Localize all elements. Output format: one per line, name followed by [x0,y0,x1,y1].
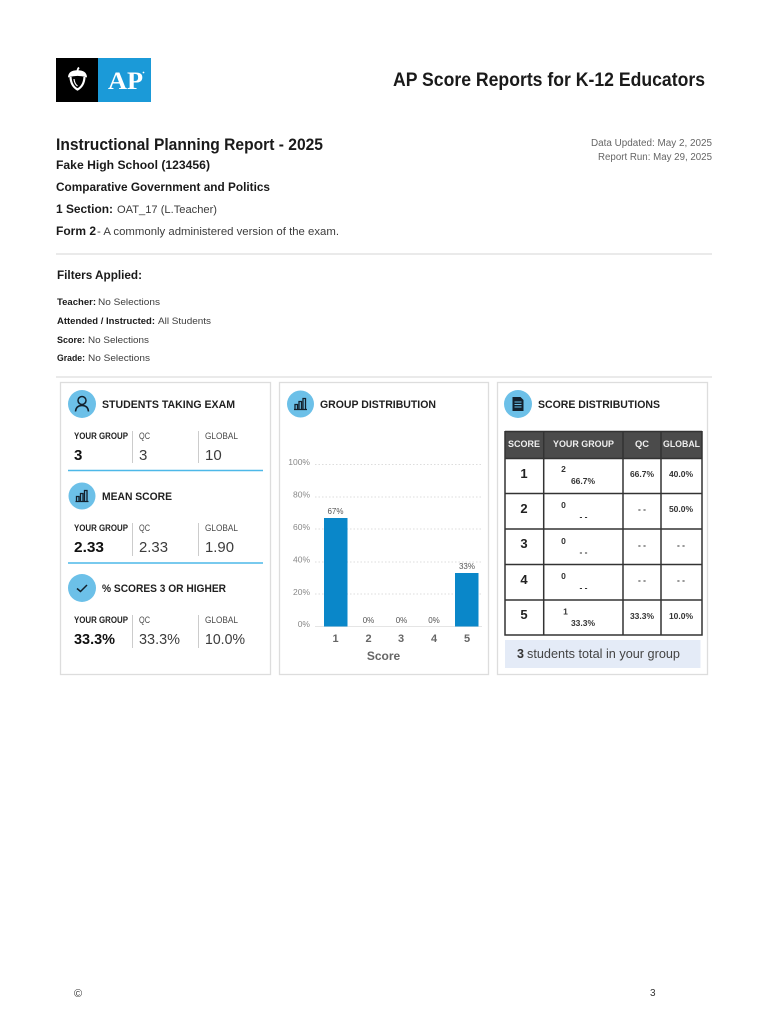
table: 5 [520,607,528,622]
table: 1 [520,466,528,481]
callout: students total: 3 [517,647,524,661]
icon: document [504,390,532,418]
table: 2 [520,501,528,516]
table: 4 [520,572,528,587]
icon: bars [68,482,96,510]
stats: students taking exam: QC [139,431,150,441]
table: - - [677,575,685,585]
bar chart: 40% [293,554,310,564]
report dates: Report Run: May 29, 2025 [598,152,712,163]
report heading: Instructional Planning Report - 2025 [56,136,323,154]
table: - - [638,540,646,550]
table: QC [635,439,649,450]
table: - - [579,512,588,522]
stats: mean score: YOUR GROUP [74,523,128,533]
heading: students taking exam: STUDENTS TAKING EXAM [102,399,235,411]
table: 66.7% [571,476,595,486]
logo: AP [56,58,151,102]
table: 10.0% [669,611,693,621]
stats: mean score: 2.33 [74,539,104,556]
filters list: No Selections [88,353,150,364]
bar chart: 0% [298,619,310,629]
filters list [57,297,211,364]
stats: scores 3 or higher: GLOBAL [205,615,238,625]
table: - - [638,575,646,585]
bar chart: 0% [363,616,374,625]
school name: Fake High School (123456) [56,158,210,172]
report dates [591,138,712,163]
bar chart: 60% [293,522,310,532]
stats: students taking exam: YOUR GROUP [74,431,128,441]
stats: students taking exam: 10 [205,447,222,464]
filters list: Score: [57,335,85,346]
stats: scores 3 or higher: 33.3% [139,631,180,648]
table: GLOBAL [663,439,700,450]
icon: student [68,390,96,418]
panel: summary statistics [60,382,270,674]
footer: copyright: © [74,988,82,1000]
table: - - [579,582,588,592]
stats: mean score: 1.90 [205,539,234,556]
bar chart: 20% [293,587,310,597]
course name: Comparative Government and Politics [56,180,270,194]
bar chart: Score [367,649,400,663]
table: YOUR GROUP [553,439,615,450]
title: AP Score Reports for K-12 Educators [393,69,705,91]
report dates: Data Updated: May 2, 2025 [591,138,712,149]
table: 0 [561,500,566,510]
bar chart: 5 [464,633,470,645]
bar chart: 100% [288,457,310,467]
stats: mean score: QC [139,523,150,533]
filters list: Grade: [57,353,85,364]
form line: Form 2 [56,224,96,238]
footer: page number: 3 [650,988,656,999]
table: SCORE [508,439,540,450]
panel: score distributions [498,382,708,674]
icon: check [68,574,96,602]
icon: acorn [69,68,86,90]
filters list: No Selections [88,335,149,346]
filters list: No Selections [98,297,160,308]
panel: group distribution [280,382,488,674]
table: 0 [561,536,566,546]
icon: bars [287,390,314,418]
stats: students taking exam [74,431,238,464]
section line: OAT_17 (L.Teacher) [117,204,217,216]
filters list: Teacher: [57,297,96,308]
bar chart: 80% [293,490,310,500]
heading: group distribution: GROUP DISTRIBUTION [320,399,436,411]
callout: students total: students total in your group [527,647,680,661]
stats: scores 3 or higher: 33.3% [74,631,115,648]
table: 0 [561,571,566,581]
stats: students taking exam: 3 [139,447,147,464]
table: 50.0% [669,504,693,514]
bar chart: 4 [431,633,438,645]
table: 3 [520,536,528,551]
table: - - [638,504,646,514]
stats: students taking exam: GLOBAL [205,431,238,441]
stats: scores 3 or higher: YOUR GROUP [74,615,128,625]
table: 66.7% [630,469,654,479]
table: 33.3% [571,618,595,628]
bar chart: 2 [365,633,372,645]
bar chart: 67% [327,507,344,516]
section line: 1 Section: [56,202,113,216]
stats: mean score: GLOBAL [205,523,238,533]
table [505,431,702,636]
stats: students taking exam: 3 [74,447,82,464]
table: 2 [561,464,566,474]
stats: scores 3 or higher: QC [139,615,150,625]
bar chart [288,457,482,663]
stats: mean score [74,523,238,556]
filters list: All Students [158,316,211,327]
logo: AP: AP [108,68,143,95]
table: - - [579,547,588,557]
section line [56,202,217,216]
stats: scores 3 or higher: 10.0% [205,631,245,648]
bar chart: 33% [459,562,475,571]
table: 40.0% [669,469,693,479]
bar chart: 3 [398,633,404,645]
heading: scores 3 or higher: % SCORES 3 OR HIGHER [102,583,226,595]
table: 1 [563,606,568,616]
stats: mean score: 2.33 [139,539,168,556]
bar chart: 1 [332,633,339,645]
bar chart: 0% [428,616,440,625]
heading: score distributions: SCORE DISTRIBUTIONS [538,399,660,411]
callout: students total [505,640,700,668]
heading: mean score: MEAN SCORE [102,491,172,503]
stats: scores 3 or higher [74,615,245,648]
bar chart: 0% [396,616,407,625]
form line: - A commonly administered version of the exam. [97,226,339,238]
table: 33.3% [630,611,654,621]
table: - - [677,540,685,550]
filters heading: Filters Applied: [57,268,142,282]
filters list: Attended / Instructed: [57,316,155,327]
